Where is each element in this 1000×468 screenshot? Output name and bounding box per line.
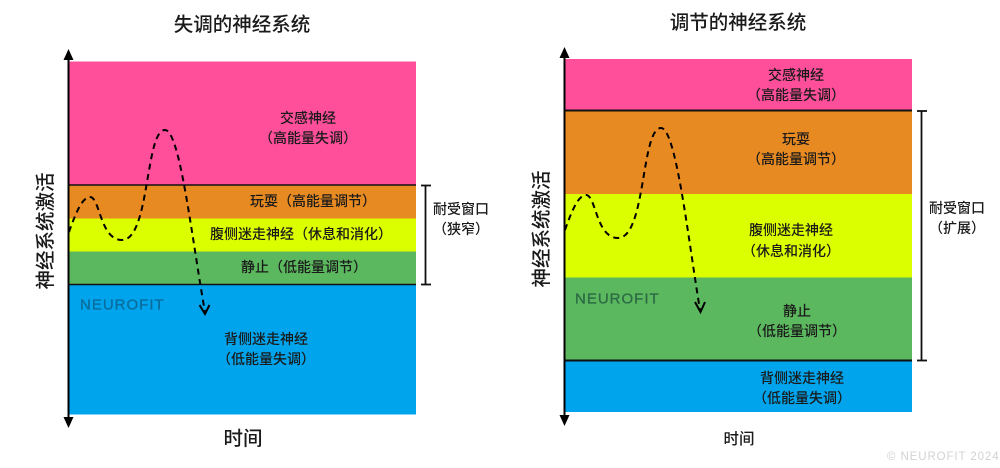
bracket: window of tolerance (917, 111, 927, 360)
band: dorsal vagal (69, 284, 416, 414)
band: play: 玩耍（高能量调节） (250, 193, 376, 209)
x axis label: 时间 (223, 428, 263, 450)
band: rest (565, 278, 912, 360)
y axis arrow (64, 49, 74, 428)
label: window of tolerance, narrow: 耐受窗口 (433, 201, 489, 217)
band: rest (69, 252, 416, 284)
band: dorsal vagal: 背侧迷走神经 (224, 331, 308, 347)
band: rest: 静止 (783, 303, 811, 319)
tolerance boundary lines (564, 110, 912, 360)
band: sympathetic: 交感神经 (280, 110, 336, 126)
y axis arrow (560, 47, 570, 426)
band: sympathetic (565, 59, 912, 111)
panel: dysregulated nervous system (35, 14, 489, 450)
label: window of tolerance, narrow (433, 201, 489, 237)
watermark: NEUROFIT: NEUROFIT (80, 296, 165, 314)
band: sympathetic (69, 62, 416, 186)
heading: dysregulated: 失调的神经系统 (174, 14, 310, 36)
label: window of tolerance, expanded: （扩展） (929, 220, 985, 236)
x axis label: 时间 (723, 430, 755, 448)
y axis label: 神经系统激活 (35, 172, 57, 290)
y axis label: 神经系统激活 (531, 170, 553, 288)
band: play: （高能量调节） (747, 151, 845, 167)
label: window of tolerance, narrow: （狭窄） (433, 221, 489, 237)
band: ventral vagal: 腹侧迷走神经（休息和消化） (210, 226, 392, 242)
band: play: 玩耍 (782, 131, 810, 147)
label: window of tolerance, expanded: 耐受窗口 (929, 200, 985, 216)
band: sympathetic: 交感神经 (768, 67, 824, 83)
band: ventral vagal: 腹侧迷走神经 (749, 222, 833, 238)
tolerance boundary lines (68, 185, 416, 284)
band: dorsal vagal (565, 360, 912, 412)
band: dorsal vagal: （低能量失调） (753, 390, 851, 406)
band: dorsal vagal: 背侧迷走神经 (760, 370, 844, 386)
band: rest: （低能量调节） (748, 323, 846, 339)
band: ventral vagal: （休息和消化） (742, 243, 840, 259)
watermark: NEUROFIT: NEUROFIT (575, 290, 660, 308)
band: sympathetic: （高能量失调） (747, 87, 845, 103)
nervous system activation curve (69, 130, 210, 314)
band: ventral vagal (69, 218, 416, 252)
band: play (565, 111, 912, 194)
bracket: window of tolerance (421, 185, 431, 284)
label: window of tolerance, expanded (929, 200, 985, 236)
band: sympathetic: （高能量失调） (259, 130, 357, 146)
band: dorsal vagal: （低能量失调） (217, 351, 315, 367)
heading: regulated: 调节的神经系统 (670, 12, 806, 34)
copyright: © NEUROFIT 2024 (887, 451, 1000, 463)
panel: regulated nervous system (531, 12, 985, 448)
band: play (69, 185, 416, 218)
band: rest: 静止（低能量调节） (241, 259, 367, 275)
band: ventral vagal (565, 194, 912, 278)
nervous system activation curve (565, 128, 705, 312)
